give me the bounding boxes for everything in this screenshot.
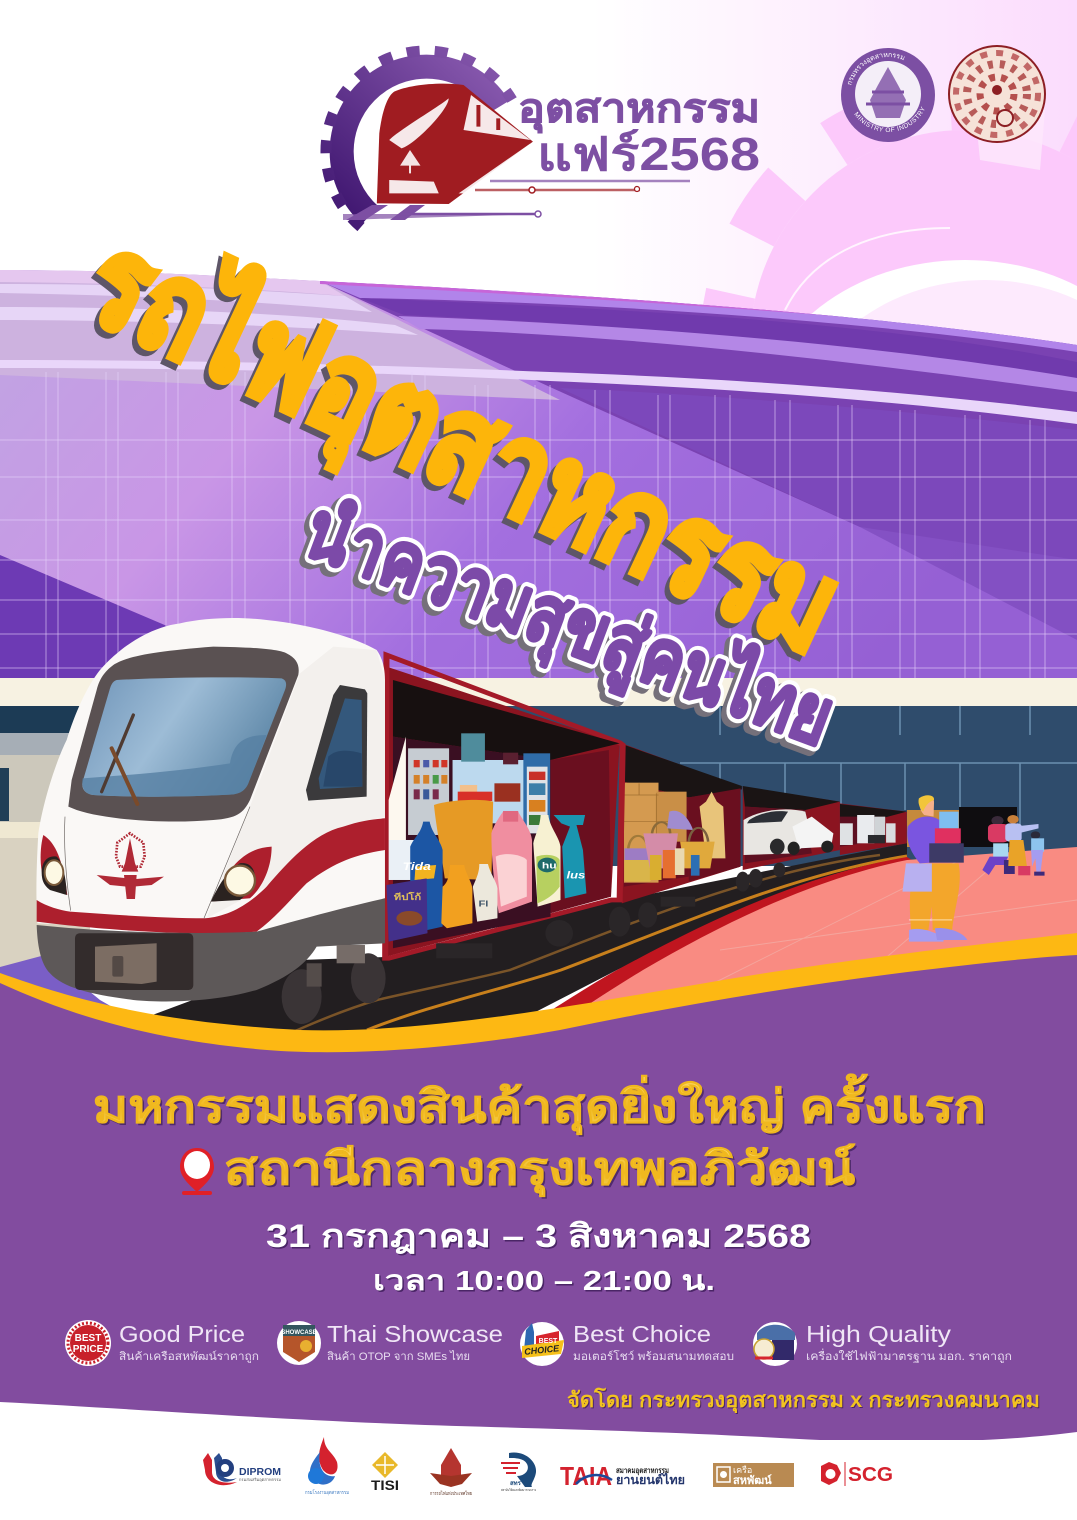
icon: thai showcase badge (277, 1321, 321, 1365)
carriage 3 (743, 786, 840, 870)
windscreen glass (82, 677, 286, 797)
headline: event: มหกรรมแสดงสินค้าสุดยิ่งใหญ่ ครั้งแรก (95, 1075, 988, 1137)
carriage 1 (385, 655, 623, 958)
feature: high quality (753, 1321, 1012, 1366)
time: เวลา 10:00 – 21:00 น. (373, 1265, 715, 1296)
feature: thai showcase (277, 1321, 503, 1365)
products: Fl (478, 900, 489, 909)
logo: SCG: SCG (848, 1464, 893, 1486)
main title: รถไฟอุตสาหกรรม (58, 211, 857, 692)
logo train (377, 84, 533, 204)
seal: ministry of industry: MINISTRY OF INDUSTRY (854, 106, 924, 132)
feature: good price: Good Price (119, 1321, 245, 1347)
white footer (0, 1402, 1077, 1520)
logo: SRTET (501, 1453, 536, 1492)
handbags (624, 811, 715, 882)
cab seam (65, 807, 250, 918)
icon: high quality badge (753, 1322, 797, 1366)
feature: good price: สินค้าเครือสหพัฒน์ราคาถูก (119, 1350, 259, 1363)
headline: event: มหกรรมแสดงสินค้าสุดยิ่งใหญ่ ครั้งแรก (93, 1073, 986, 1135)
logo: industry fair 2568 (326, 51, 760, 227)
feature: best choice (520, 1321, 734, 1366)
head (919, 797, 934, 817)
panel: station lower wall (0, 678, 1077, 968)
logo: DIPROM (203, 1453, 281, 1485)
store scene (389, 733, 550, 880)
bogies (282, 945, 386, 1024)
products: hu (542, 861, 557, 871)
logo: department of industrial works (305, 1437, 349, 1496)
person 1 (982, 816, 1015, 875)
mannequin (700, 792, 725, 858)
logo tracks (343, 205, 540, 220)
bottom panel: wave and purple background (0, 933, 1077, 1440)
headline: venue: สถานีกลางกรุงเทพอภิวัฒน์ (224, 1143, 856, 1197)
organiser line: จัดโดย กระทรวงอุตสาหกรรม x กระทรวงคมนาคม (567, 1387, 1040, 1414)
icon: best choice badge: CHOICE (524, 1343, 561, 1357)
emblem: state railway (97, 833, 164, 899)
logo: TAIA (560, 1461, 685, 1491)
seal: ministry of industry: กรมทรวงอุตสาหกรรม (848, 53, 905, 85)
side window (306, 685, 367, 801)
logo: TAIA: ยานยนต์ไทย (616, 1472, 685, 1487)
shoes (909, 929, 943, 942)
facade grid (0, 372, 1077, 680)
platform red edge (520, 857, 915, 1030)
platform: left purple (0, 955, 170, 1040)
headline: venue: สถานีกลางกรุงเทพอภิวัฒน์ (226, 1145, 858, 1199)
seal: ministry of industry (841, 48, 935, 142)
coupler (75, 933, 193, 990)
body (36, 618, 385, 933)
main title: รถไฟอุตสาหกรรม (63, 206, 862, 687)
panel: station building facade (0, 270, 1077, 678)
icon: thai showcase badge: SHOWCASE (281, 1330, 317, 1336)
icon: best price badge (65, 1320, 111, 1366)
logo: TAIA: สมาคมอุตสาหกรรม (616, 1466, 669, 1476)
gifts (939, 812, 959, 828)
logo: SCG (821, 1462, 893, 1486)
logo: SRTET: สทร (510, 1480, 522, 1487)
track bed and rails (147, 843, 915, 1070)
logo speed lines (400, 181, 690, 217)
date: 31 กรกฎาคม – 3 สิงหาคม 2568 (266, 1218, 811, 1254)
products: ทีปโก้ (394, 891, 421, 903)
feature: thai showcase: Thai Showcase (327, 1321, 503, 1347)
carriage 4 (840, 803, 907, 855)
bogies under carriages (436, 863, 785, 958)
logo: TISI (371, 1452, 399, 1493)
logo: state railway of thailand (430, 1448, 472, 1497)
subtitle: นำความสุขสู่คนไทย (292, 483, 846, 768)
logo: TAIA: TAIA (560, 1461, 612, 1491)
right headlight (211, 847, 272, 902)
seal: ministry of transport (949, 46, 1045, 142)
organiser line: จัดโดย กระทรวงอุตสาหกรรม x กระทรวงคมนาคม (568, 1388, 1041, 1415)
logo: DIPROM: กรมส่งเสริมอุตสาหกรรม (239, 1477, 281, 1483)
station roof bands (0, 270, 1077, 560)
icon: best price badge: PRICE (73, 1344, 104, 1355)
carriage 2 (620, 743, 742, 903)
logo: DIPROM: DIPROM (239, 1467, 281, 1478)
lower-left dark facade (0, 555, 167, 678)
icon: location pin (180, 1148, 214, 1195)
logo: state railway of thailand: การรถไฟแห่งประเทศไทย (430, 1490, 472, 1497)
child (1031, 831, 1045, 876)
left headlight (41, 835, 67, 895)
subtitle (287, 482, 846, 773)
lower skirt (37, 898, 385, 1001)
person 2 (1005, 815, 1038, 875)
car (744, 809, 833, 855)
train head (36, 618, 386, 1024)
side shading (207, 647, 385, 918)
logo title: อุตสาหกรรม (518, 87, 760, 134)
boxes (624, 783, 687, 883)
feature: best choice: Best Choice (573, 1321, 711, 1347)
logo: saha group: เครือ (733, 1465, 752, 1475)
feature: high quality: High Quality (806, 1321, 952, 1347)
feature: best choice: มอเตอร์โชว์ พร้อมสนามทดสอบ (573, 1349, 734, 1363)
date: 31 กรกฎาคม – 3 สิงหาคม 2568 (268, 1220, 812, 1256)
scooter (792, 817, 833, 848)
legs (910, 863, 960, 930)
logo: SRTET: สถาบันวิจัยและพัฒนาระบบราง (501, 1488, 536, 1492)
background: top pale gradient (0, 0, 1077, 420)
icon: best choice badge (520, 1322, 564, 1366)
red stripe (37, 818, 385, 933)
dark door and boxes behind shoppers (907, 807, 1017, 847)
wipers (102, 715, 137, 804)
feature: high quality: เครื่องใช้ไฟฟ้ามาตรฐาน มอก. ราคาถูก (806, 1348, 1012, 1363)
appliances (840, 815, 896, 845)
shopper man (902, 795, 967, 942)
logo: TISI: TISI (371, 1477, 399, 1493)
products: lus (567, 871, 586, 881)
subtitle: นำความสุขสู่คนไทย (292, 483, 846, 768)
windscreen frame (68, 647, 299, 822)
products (386, 800, 586, 942)
products: Tida (403, 860, 431, 873)
platform pink (548, 847, 1077, 1040)
logo gear (326, 51, 512, 227)
logo: saha group (713, 1463, 794, 1487)
train carriages (385, 655, 907, 958)
logo: saha group: สหพัฒน์ (733, 1474, 772, 1487)
feature: thai showcase: สินค้า OTOP จาก SMEs ไทย (327, 1350, 470, 1363)
feature: good price (65, 1320, 259, 1366)
subtitle: นำความสุขสู่คนไทย (287, 486, 841, 772)
shopping bag (902, 863, 932, 892)
facade shadow panel (560, 388, 1077, 640)
logo: industry fair 2568: แฟร์2568 (537, 128, 760, 180)
icon: best price badge: BEST (75, 1333, 101, 1344)
time: เวลา 10:00 – 21:00 น. (374, 1266, 716, 1298)
icon: best choice badge: BEST (539, 1338, 558, 1345)
torso (907, 816, 946, 863)
background: pale pink gear (725, 62, 1077, 600)
logo: department of industrial works: กรมโรงงานอุตสาหกรรม (305, 1489, 349, 1496)
shoppers group (982, 815, 1045, 876)
headline: event (93, 1073, 988, 1137)
